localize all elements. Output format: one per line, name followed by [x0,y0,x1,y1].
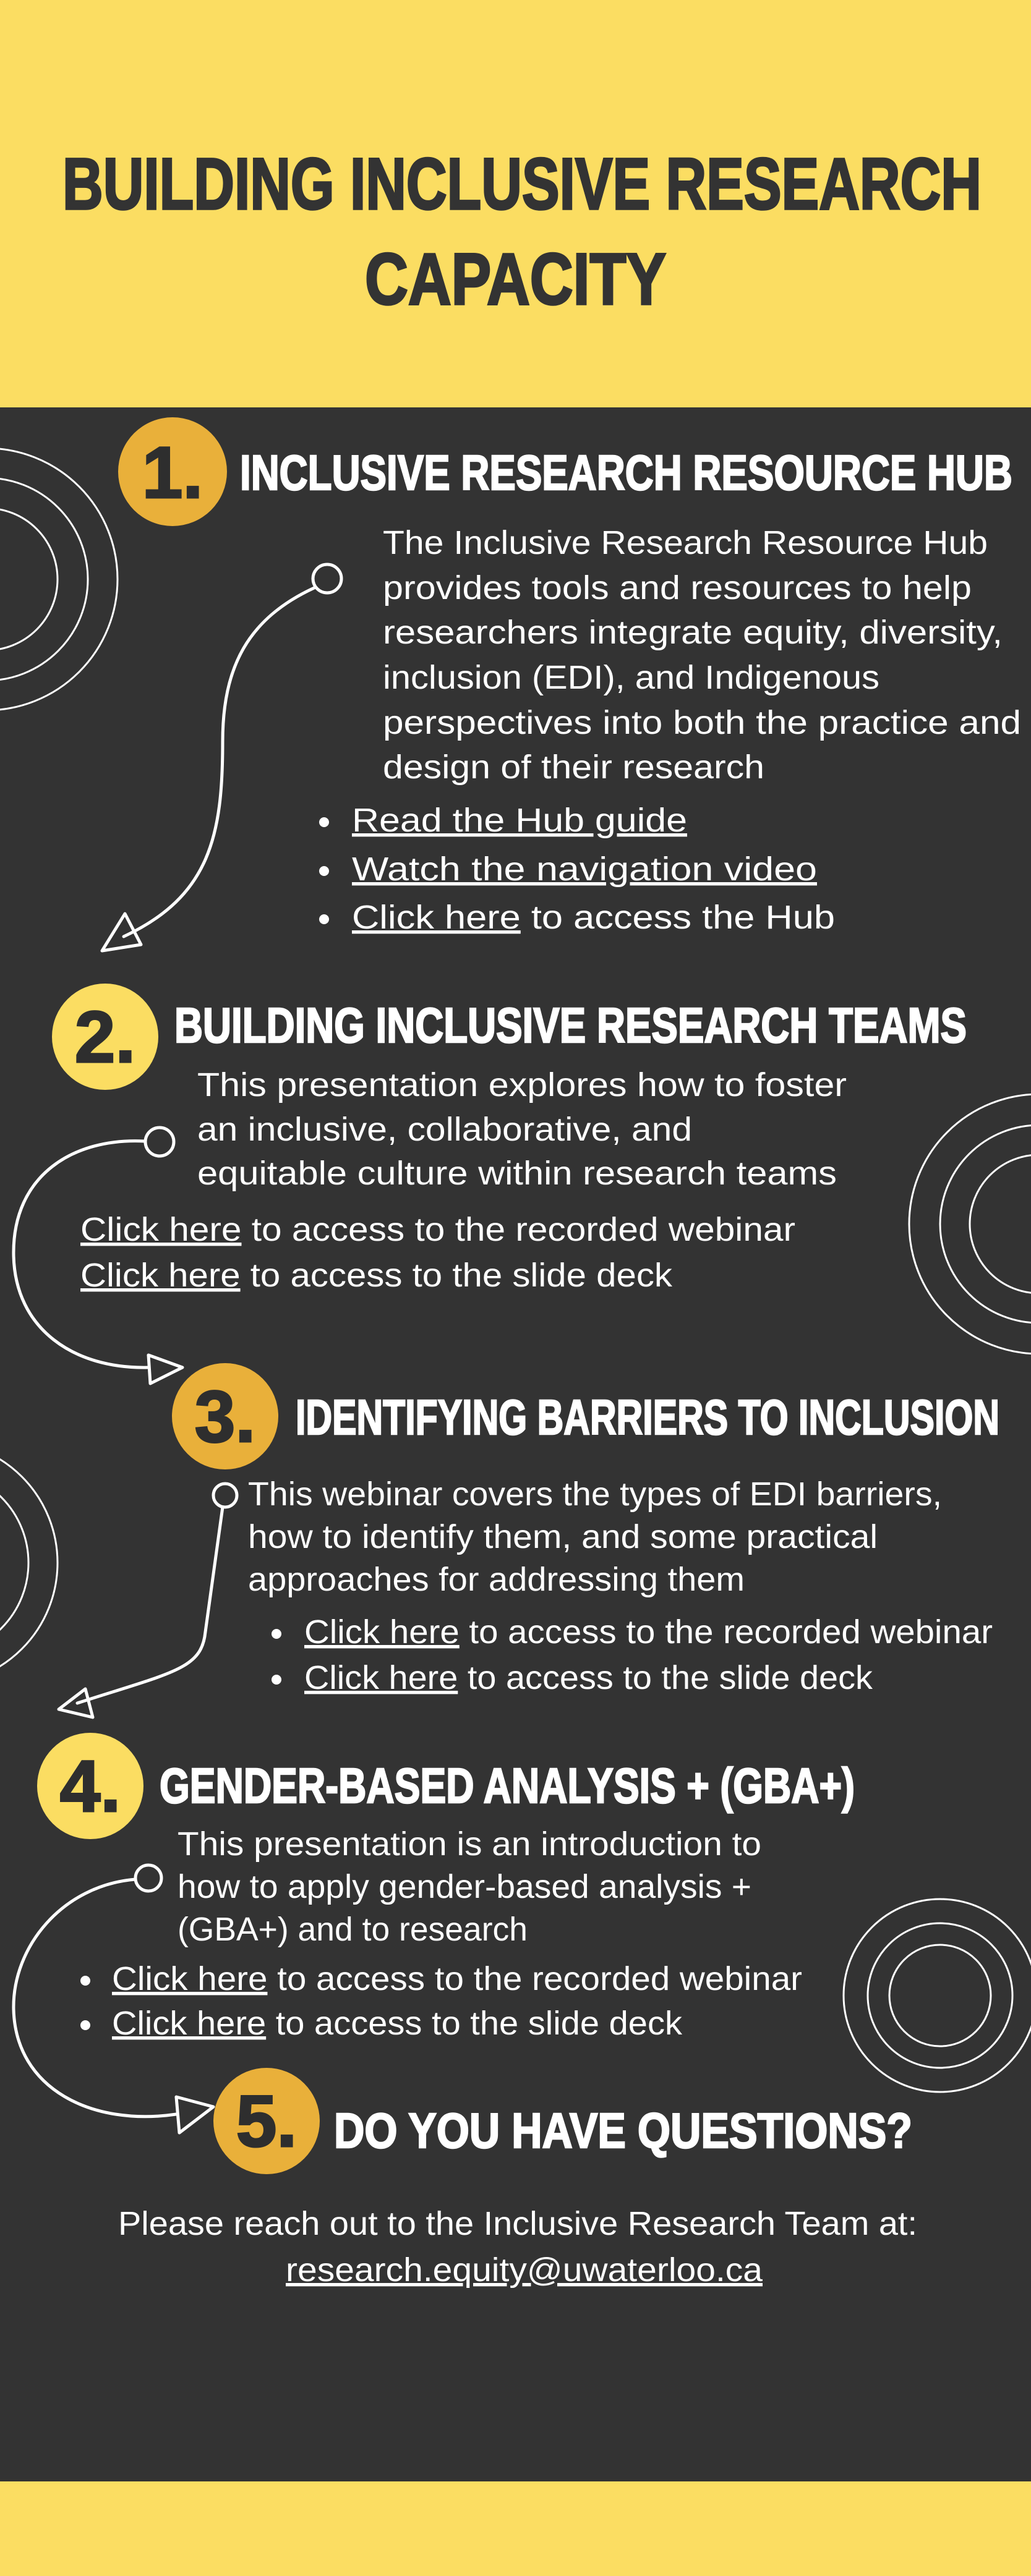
text: GBA+ description: This presentation is an introduction to [178,1826,761,1863]
title [62,143,982,320]
contact text: Please reach out to the Inclusive Research Team at: [118,2205,917,2242]
links list 3: Click here to access to the slide deck [304,1659,873,1696]
badge 4: 4. [60,1746,121,1827]
footer band [0,2481,1031,2576]
badge 3: 3. [195,1376,255,1458]
section 5 [118,2068,917,2289]
text: teams description: equitable culture within research teams [197,1155,837,1192]
text: hub description: provides tools and resources to help [383,569,972,606]
links 2: Click here to access to the slide deck [80,1257,673,1294]
text: hub description: design of their research [383,749,764,786]
heading 4: GENDER-BASED ANALYSIS + (GBA+) [160,1758,855,1813]
contact text: research.equity@uwaterloo.ca [286,2251,763,2289]
badge 5: 5. [236,2081,297,2162]
links list 1 [319,802,835,936]
header band [0,0,1031,407]
decorative circles left (section 3) [0,1441,58,1685]
text: hub description: The Inclusive Research Resource Hub [383,524,988,561]
section 2 [14,984,967,1384]
links 2: Click here to access to the recorded webinar [80,1211,795,1248]
text: GBA+ description: how to apply gender-based analysis + [178,1868,751,1905]
badge 2: 2. [75,997,135,1078]
links list 3: Click here to access to the recorded webinar [304,1613,993,1651]
section 1 [102,417,1021,951]
links list 4: Click here to access to the slide deck [112,2005,683,2042]
links list 3 [272,1613,993,1696]
text: hub description: researchers integrate equity, diversity, [383,614,1003,651]
text: GBA+ description [178,1826,761,1948]
arrow 1 [102,564,341,951]
text: hub description [383,524,1021,786]
badge 1 [118,417,227,526]
links 2 [80,1211,795,1294]
links list 4 [80,1960,802,2042]
text: barriers description: approaches for addressing them [248,1561,745,1598]
title: CAPACITY [365,239,666,320]
badge 5 [213,2068,320,2174]
links list 1: Watch the navigation video [352,851,817,888]
text: teams description [197,1066,847,1192]
heading 5: DO YOU HAVE QUESTIONS? [334,2103,912,2158]
text: hub description: inclusion (EDI), and Indigenous [383,659,879,696]
text: hub description: perspectives into both the practice and [383,704,1021,741]
decorative circles left top [0,448,118,710]
links list 1: Click here to access the Hub [352,899,835,936]
text: teams description: an inclusive, collaborative, and [197,1111,692,1148]
text: teams description: This presentation explores how to foster [197,1066,847,1103]
section 3 [59,1363,999,1717]
arrow 2 [14,1128,182,1384]
arrow 4 [14,1865,213,2133]
links list 4: Click here to access to the recorded webinar [112,1960,802,1997]
text: GBA+ description: (GBA+) and to research [178,1911,528,1948]
links list 1: Read the Hub guide [352,802,687,839]
badge 1: 1. [142,432,203,514]
text: barriers description [248,1476,942,1598]
contact text [118,2205,917,2289]
decorative circles right (section 4) [844,1899,1031,2092]
arrow 3 [59,1484,237,1717]
decorative circles right (section 2) [909,1094,1031,1354]
badge 4 [37,1733,143,1839]
badge 2 [52,984,158,1090]
text: barriers description: how to identify them, and some practical [248,1518,878,1555]
section 4 [14,1733,855,2133]
badge 3 [172,1363,278,1469]
text: barriers description: This webinar covers the types of EDI barriers, [248,1476,942,1513]
